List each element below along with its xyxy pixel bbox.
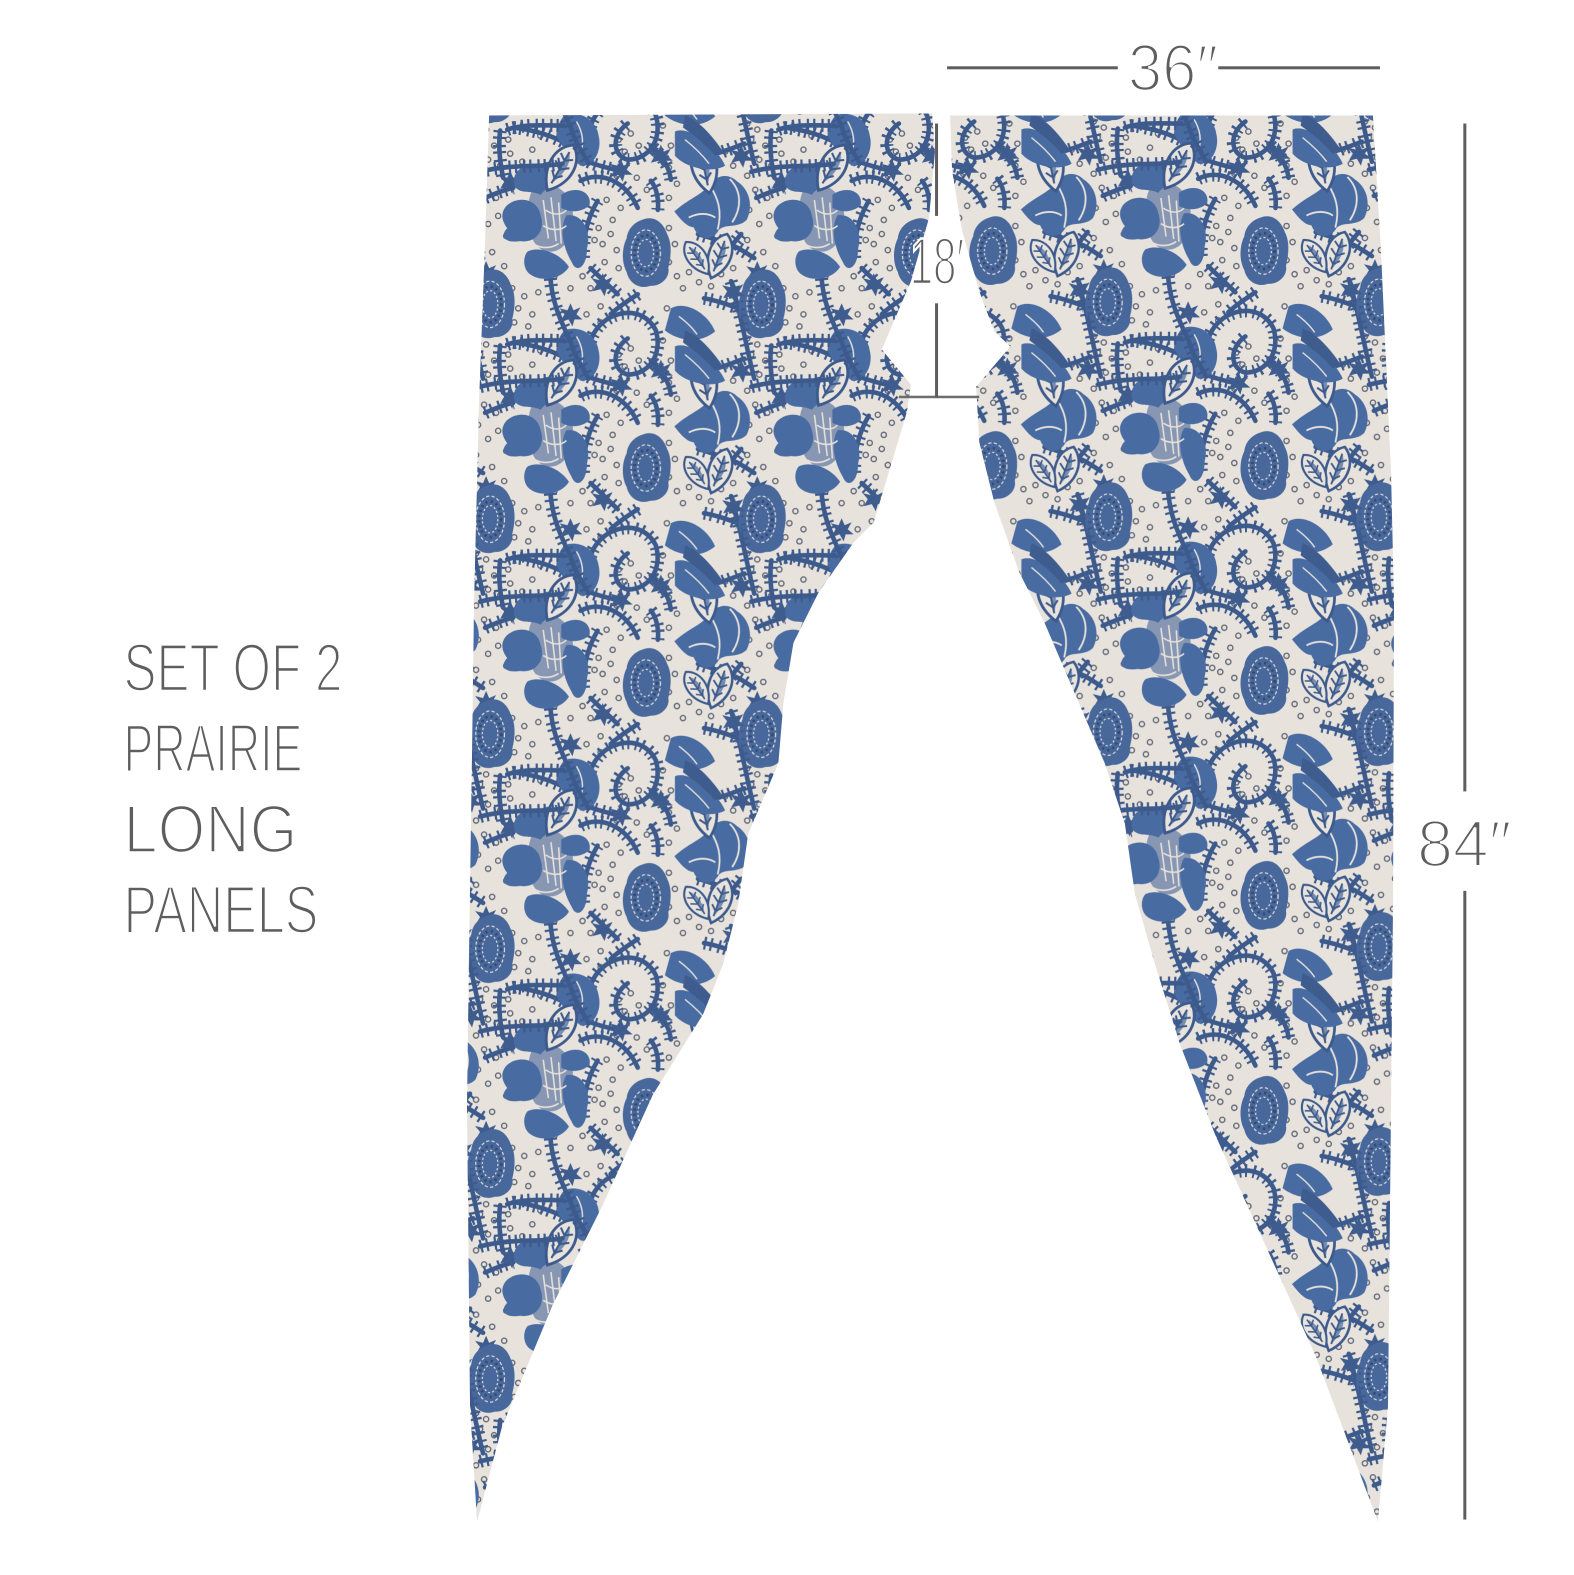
height dimension: 84 inches: 84″ (1417, 808, 1512, 882)
width dimension: 36 inches (947, 31, 1380, 105)
product title text: PANELS (124, 873, 318, 948)
product title text: SET OF 2 (124, 631, 342, 706)
height dimension: 84 inches (1417, 124, 1512, 1520)
product title text: PRAIRIE (124, 711, 302, 786)
tieback dimension: 18 inches: 18′ (910, 225, 964, 299)
width dimension: 36 inches: 36″ (1128, 31, 1218, 105)
right curtain panel (950, 115, 1394, 1522)
tieback dimension: 18 inches (899, 124, 979, 398)
product title text: LONG (124, 793, 297, 868)
left curtain panel (467, 113, 935, 1522)
product title text (124, 631, 342, 948)
